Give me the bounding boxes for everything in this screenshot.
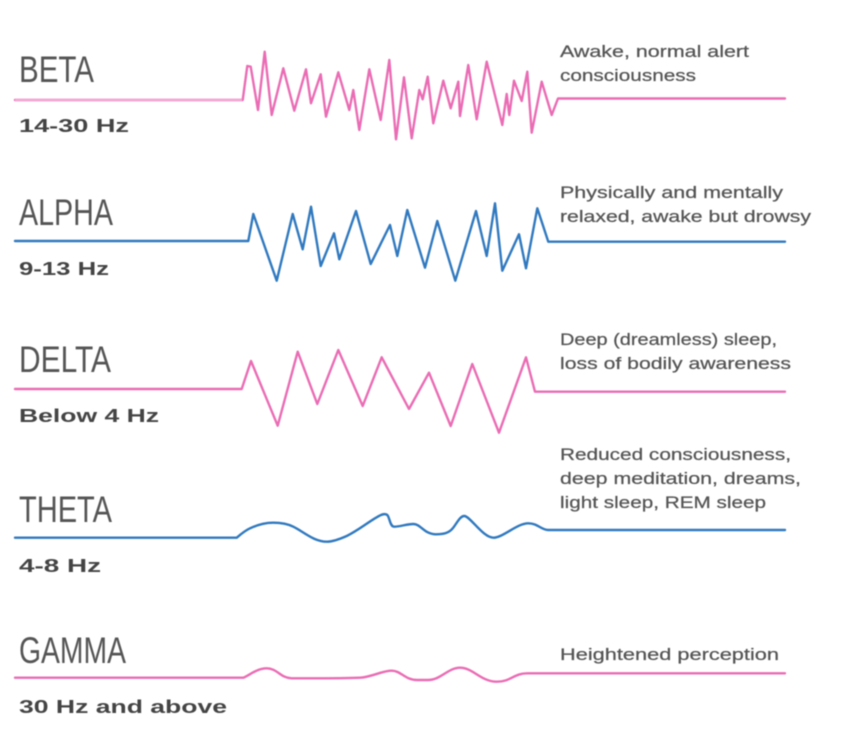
frequency: alpha: 9-13 Hz <box>19 259 109 279</box>
wave: theta <box>15 514 785 542</box>
heading: gamma: GAMMA <box>19 630 126 671</box>
description: theta: Reduced consciousness, <box>560 445 791 464</box>
description: theta: deep meditation, dreams, <box>560 469 801 488</box>
wave: alpha <box>15 203 785 281</box>
description: theta <box>560 445 801 512</box>
description: delta <box>560 330 791 373</box>
heading: beta: BETA <box>19 49 94 90</box>
frequency: theta: 4-8 Hz <box>19 556 101 576</box>
heading: theta: THETA <box>19 489 112 530</box>
description: delta: loss of bodily awareness <box>560 354 791 373</box>
heading: delta: DELTA <box>19 339 111 380</box>
description: beta <box>560 42 749 85</box>
panel: theta <box>15 445 801 576</box>
wave: gamma <box>15 668 785 682</box>
wave: beta <box>15 52 785 139</box>
description: alpha: Physically and mentally <box>560 183 784 202</box>
description: beta: consciousness <box>560 66 696 85</box>
panel: alpha <box>15 183 812 281</box>
panel: beta <box>15 42 785 139</box>
frequency: gamma: 30 Hz and above <box>19 697 227 717</box>
description: delta: Deep (dreamless) sleep, <box>560 330 777 349</box>
frequency: delta: Below 4 Hz <box>19 406 159 426</box>
description: alpha: relaxed, awake but drowsy <box>560 207 812 226</box>
description: theta: light sleep, REM sleep <box>560 493 766 512</box>
description: beta: Awake, normal alert <box>560 42 749 61</box>
wave: delta <box>15 350 785 433</box>
description: gamma: Heightened perception <box>560 645 779 664</box>
description: alpha <box>560 183 812 226</box>
panel: delta <box>15 330 791 433</box>
frequency: beta: 14-30 Hz <box>19 116 129 136</box>
heading: alpha: ALPHA <box>19 192 113 233</box>
panel: gamma <box>15 630 785 717</box>
